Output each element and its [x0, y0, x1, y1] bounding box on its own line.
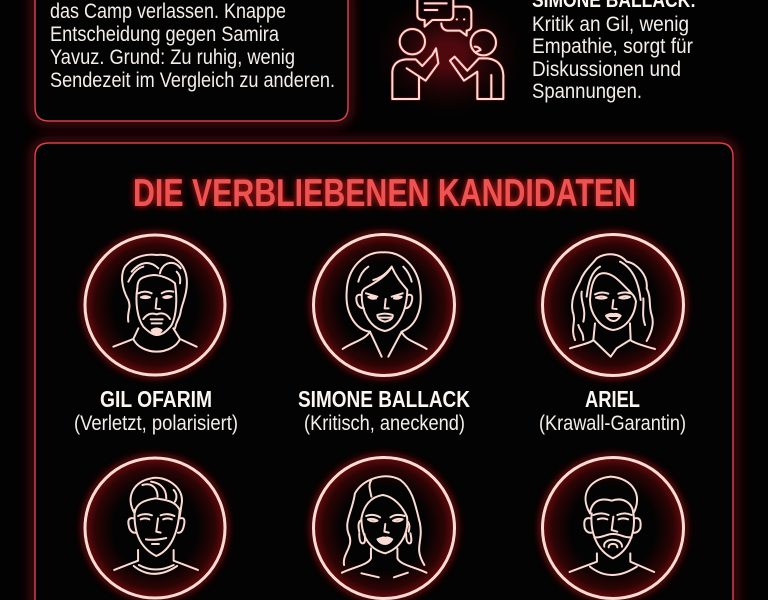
panel: eliminated candidate	[35, 0, 348, 121]
text: Simone Ballack note: Empathie, sorgt für	[532, 35, 693, 58]
text: Simone Ballack note	[532, 0, 696, 103]
portrait: Simone Ballack	[314, 234, 454, 376]
text: elimination explanation	[50, 0, 335, 92]
heading: DIE VERBLIEBENEN KANDIDATEN	[133, 172, 636, 215]
descriptor: Simone Ballack: (Kritisch, aneckend)	[304, 412, 465, 435]
name: Simone Ballack: SIMONE BALLACK	[298, 386, 470, 412]
heading: DIE VERBLIEBENEN KANDIDATEN	[133, 172, 636, 215]
name: Gil Ofarim: GIL OFARIM	[100, 386, 212, 412]
portrait: bearded man	[542, 458, 684, 598]
portrait: man with swept hair	[85, 458, 225, 598]
descriptor: Gil Ofarim: (Verletzt, polarisiert)	[74, 412, 238, 435]
candidate: Ariel	[539, 234, 686, 435]
text: Simone Ballack note: Spannungen.	[532, 80, 642, 103]
text: Simone Ballack note: Diskussionen und	[532, 58, 681, 81]
text: elimination explanation: Entscheidung gegen Samira	[50, 23, 279, 46]
candidate: Simone Ballack	[298, 234, 470, 435]
descriptor: Ariel: (Krawall-Garantin)	[539, 412, 686, 435]
icon: two people arguing with speech bubbles	[373, 0, 523, 117]
portrait: Gil Ofarim	[85, 235, 225, 375]
text: elimination explanation: Sendezeit im Vergleich zu anderen.	[50, 69, 335, 92]
portrait: woman with long hair	[314, 458, 454, 598]
panel: remaining candidates	[35, 143, 733, 600]
text: Simone Ballack note: Kritik an Gil, wenig	[532, 13, 689, 36]
candidate: Gil Ofarim	[74, 235, 238, 435]
portrait: Ariel	[542, 234, 684, 376]
text: elimination explanation: Yavuz. Grund: Zu ruhig, wenig	[50, 46, 295, 69]
text: elimination explanation: das Camp verlassen. Knappe	[50, 0, 286, 23]
name: Ariel: ARIEL	[585, 386, 640, 412]
